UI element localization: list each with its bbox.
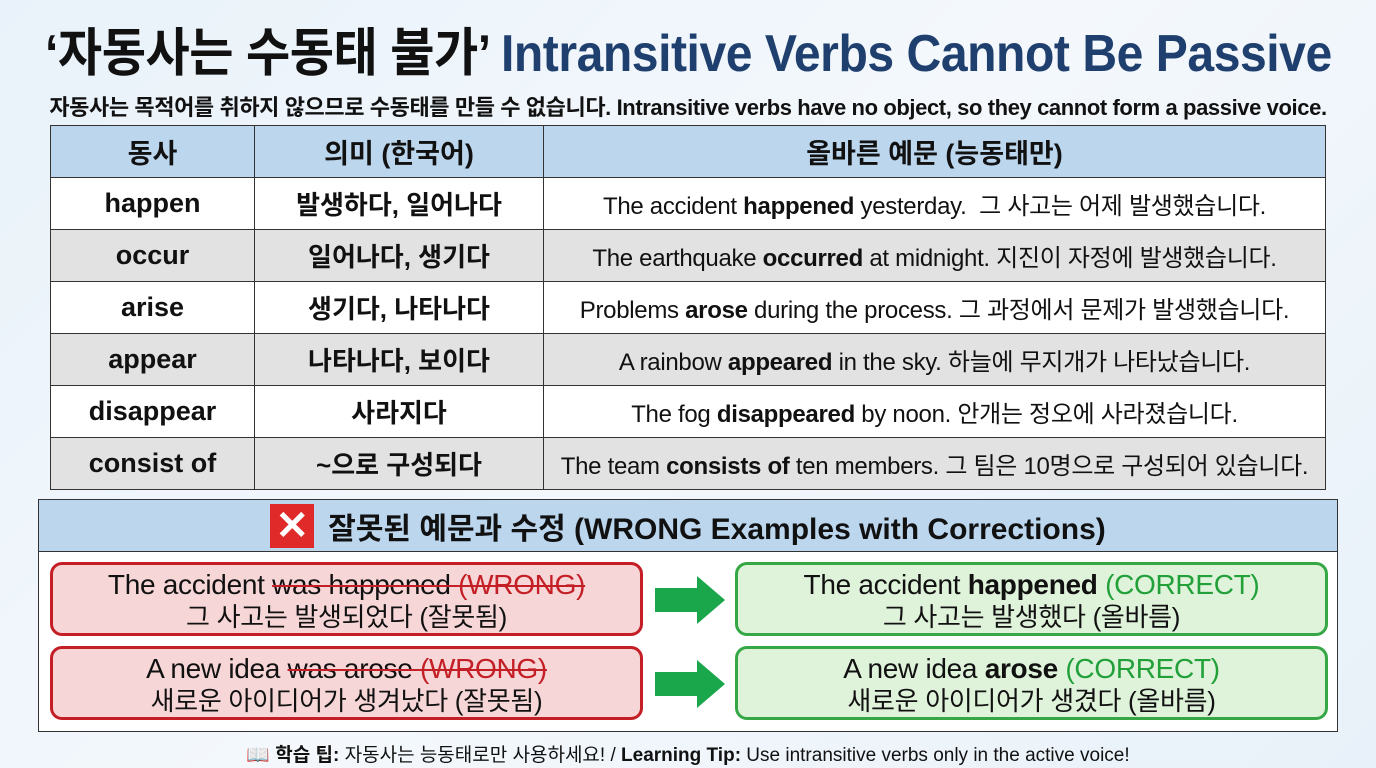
verb table: happen xyxy=(104,188,200,218)
panel: wrong examples xyxy=(38,499,1338,732)
wrong example 2: A new idea was arose (WRONG) xyxy=(146,653,547,684)
verb table: 사라지다 xyxy=(351,398,447,428)
correct example 1 xyxy=(735,562,1328,636)
verb table: disappear xyxy=(89,396,216,426)
panel heading xyxy=(39,500,1337,552)
verb table: appear xyxy=(108,344,197,374)
verb table: A rainbow appeared in the sky. 하늘에 무지개가 나타났습니다. xyxy=(619,349,1250,376)
subtitle: 자동사는 목적어를 취하지 않으므로 수동태를 만들 수 없습니다. Intransitive verbs have no object, so they cannot form a passive voice. xyxy=(49,95,1327,120)
verb table: 일어나다, 생기다 xyxy=(308,242,490,272)
verb table: 의미 (한국어) xyxy=(324,139,474,169)
correct example 2: 새로운 아이디어가 생겼다 (올바름) xyxy=(847,686,1216,716)
correct example 2: A new idea arose (CORRECT) xyxy=(843,653,1220,684)
panel heading: 잘못된 예문과 수정 (WRONG Examples with Corrections) xyxy=(328,512,1106,546)
wrong example 1: 그 사고는 발생되었다 (잘못됨) xyxy=(186,602,507,632)
title: ‘자동사는 수동태 불가’ Intransitive Verbs Cannot Be Passive xyxy=(45,25,1332,83)
verb table: Problems arose during the process. 그 과정에서 문제가 발생했습니다. xyxy=(580,297,1289,324)
verb table: ~으로 구성되다 xyxy=(316,450,482,480)
arrow 2 xyxy=(655,660,725,708)
wrong example 1 xyxy=(50,562,643,636)
verb table xyxy=(50,125,1326,490)
verb table: arise xyxy=(121,292,184,322)
correct example 1: The accident happened (CORRECT) xyxy=(804,569,1259,600)
learning tip: 📖 학습 팁: 자동사는 능동태로만 사용하세요! / Learning Tip: Use intransitive verbs only in the active voice! xyxy=(246,745,1130,766)
verb table: consist of xyxy=(89,448,216,478)
verb table: The fog disappeared by noon. 안개는 정오에 사라졌습니다. xyxy=(631,401,1238,428)
wrong example 1: The accident was happened (WRONG) xyxy=(108,569,585,600)
wrong example 2: 새로운 아이디어가 생겨났다 (잘못됨) xyxy=(151,686,542,716)
verb table: 동사 xyxy=(128,139,177,169)
verb table: The accident happened yesterday. 그 사고는 어제 발생했습니다. xyxy=(603,193,1266,220)
correct example 2 xyxy=(735,646,1328,720)
correct example 1: 그 사고는 발생했다 (올바름) xyxy=(883,602,1180,632)
arrow 1 xyxy=(655,576,725,624)
verb table: 올바른 예문 (능동태만) xyxy=(806,139,1063,169)
verb table: 생기다, 나타나다 xyxy=(308,294,490,324)
verb table: The earthquake occurred at midnight. 지진이 자정에 발생했습니다. xyxy=(592,245,1277,272)
verb table: 나타나다, 보이다 xyxy=(308,346,490,376)
wrong example 2 xyxy=(50,646,643,720)
verb table: occur xyxy=(116,240,189,270)
panel heading: ✕ xyxy=(275,504,309,548)
verb table: The team consists of ten members. 그 팀은 10명으로 구성되어 있습니다. xyxy=(561,453,1308,480)
verb table: 발생하다, 일어나다 xyxy=(296,190,502,220)
